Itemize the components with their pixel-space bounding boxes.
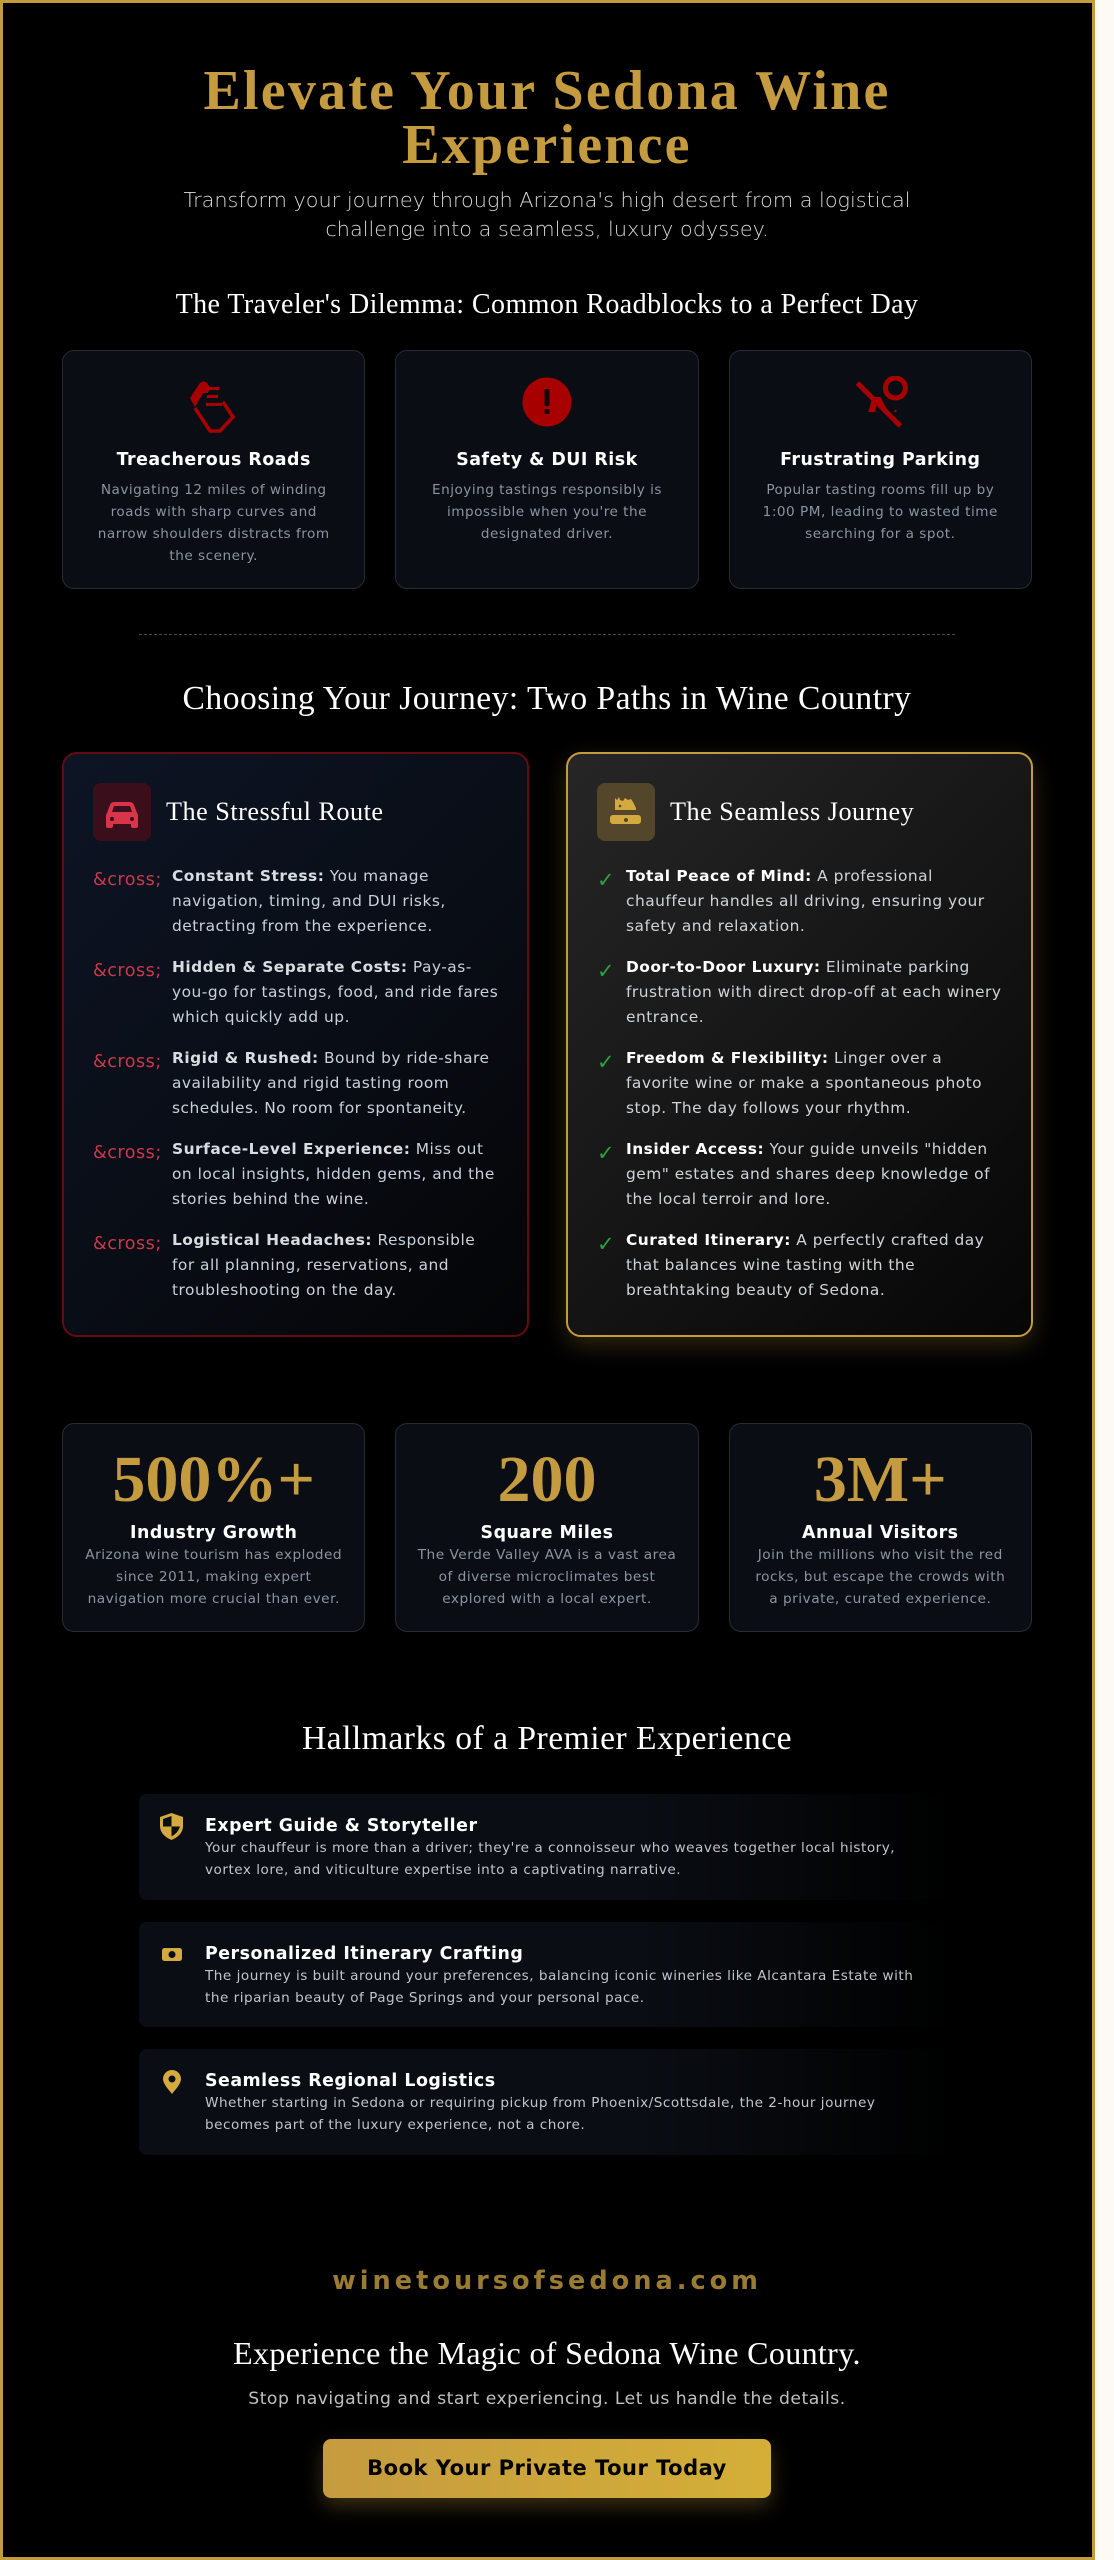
hallmark description: Whether starting in Sedona or requiring pickup from Phoenix/Scottsdale, the 2-hour journey — [205, 2095, 875, 2111]
cross items: detracting from the experience. — [172, 917, 433, 935]
stat description — [755, 1547, 1005, 1607]
stat description — [85, 1547, 342, 1607]
seamless journey content — [597, 783, 1001, 1299]
heading: hallmarks: Hallmarks of a Premier Experience — [302, 1720, 792, 1757]
stat description: navigation more crucial than ever. — [88, 1591, 340, 1607]
stressful route content — [93, 783, 498, 1299]
check items: chauffeur handles all driving, ensuring your — [626, 892, 985, 910]
cross items: schedules. No room for spontaneity. — [172, 1099, 467, 1117]
cross items: Rigid & Rushed: Bound by ride-share — [172, 1049, 489, 1067]
icon: ticket — [162, 1948, 182, 1961]
cross items: availability and rigid tasting room — [172, 1074, 449, 1092]
stat number: 500%+ — [112, 1442, 315, 1516]
cross items: Logistical Headaches: Responsible — [172, 1231, 475, 1249]
stat number: 200 — [497, 1442, 596, 1516]
cross items: for all planning, reservations, and — [172, 1256, 449, 1274]
title: Experience — [402, 114, 692, 176]
check items: the local terroir and lore. — [626, 1190, 831, 1208]
stat description: The Verde Valley AVA is a vast area — [418, 1547, 676, 1563]
check items: ✓ — [597, 958, 615, 982]
cross items: you-go for tastings, food, and ride fares — [172, 983, 498, 1001]
hallmark: logistics — [139, 2049, 959, 2154]
cross items: Surface-Level Experience: Miss out — [172, 1140, 483, 1158]
hallmark title: Expert Guide & Storyteller — [205, 1816, 478, 1836]
icon: no parking — [856, 376, 908, 428]
stat: industry growth — [62, 1423, 365, 1632]
card description: searching for a spot. — [805, 526, 955, 542]
icon: limousine — [597, 783, 655, 841]
hallmark description — [204, 1968, 913, 2006]
cross items: navigation, timing, and DUI risks, — [172, 892, 446, 910]
check items: ✓ — [597, 868, 615, 892]
stat description: since 2011, making expert — [116, 1569, 311, 1585]
stat label: Industry Growth — [130, 1523, 297, 1543]
cross items: &cross; — [93, 1234, 162, 1254]
closing heading: Experience the Magic of Sedona Wine Country. — [233, 2335, 861, 2371]
card: safety — [395, 350, 699, 589]
hallmark description — [205, 1840, 895, 1878]
hallmark: itinerary — [139, 1922, 959, 2027]
hallmark title: Personalized Itinerary Crafting — [205, 1944, 523, 1964]
card title: Safety & DUI Risk — [456, 450, 638, 470]
hallmark description: The journey is built around your preferences, balancing iconic wineries like Alcantara Estate with — [205, 1968, 913, 1984]
stat description: of diverse microclimates best — [439, 1569, 655, 1585]
check items: Insider Access: Your guide unveils "hidden — [626, 1140, 988, 1158]
stat description: a private, curated experience. — [769, 1591, 991, 1607]
cross items: Constant Stress: You manage — [172, 867, 429, 885]
button: Book Your Private Tour Today — [367, 2456, 727, 2480]
stat description — [418, 1547, 676, 1607]
stat: square miles — [395, 1423, 699, 1632]
cross items: on local insights, hidden gems, and the — [172, 1165, 495, 1183]
check items: stop. The day follows your rhythm. — [626, 1099, 911, 1117]
card description — [763, 482, 998, 542]
cross items: troubleshooting on the day. — [172, 1281, 397, 1299]
closing text: Stop navigating and start experiencing. Let us handle the details. — [248, 2388, 846, 2408]
card description: designated driver. — [481, 526, 613, 542]
check items: Curated Itinerary: A perfectly crafted day — [626, 1231, 984, 1249]
subtitle — [183, 188, 911, 241]
card description: the scenery. — [169, 548, 258, 564]
cross items: &cross; — [93, 1142, 162, 1162]
panel: seamless journey — [566, 752, 1033, 1337]
check items: that balances wine tasting with the — [626, 1256, 915, 1274]
card description: Navigating 12 miles of winding — [101, 482, 327, 498]
cross items: &cross; — [93, 1052, 162, 1072]
card description: impossible when you're the — [447, 504, 647, 520]
card title: Treacherous Roads — [117, 450, 311, 470]
check items: Door-to-Door Luxury: Eliminate parking — [626, 958, 970, 976]
stat number: 3M+ — [814, 1442, 947, 1516]
card description: roads with sharp curves and — [111, 504, 317, 520]
hallmark description — [205, 2095, 875, 2133]
panel heading: The Stressful Route — [166, 797, 384, 826]
card: treacherous roads — [62, 350, 365, 589]
check items: ✓ — [597, 1050, 615, 1074]
card title: Frustrating Parking — [780, 450, 980, 470]
hallmark description: becomes part of the luxury experience, not a chore. — [205, 2117, 585, 2133]
check items — [597, 867, 1001, 1299]
check items: favorite wine or make a spontaneous photo — [626, 1074, 982, 1092]
icon: shield — [160, 1813, 183, 1840]
icon: car — [93, 783, 151, 841]
subtitle: challenge into a seamless, luxury odyssey. — [325, 217, 769, 241]
heading: journey: Choosing Your Journey: Two Paths in Wine Country — [183, 680, 911, 717]
check items: Freedom & Flexibility: Linger over a — [626, 1049, 942, 1067]
stat description: Join the millions who visit the red — [758, 1547, 1003, 1563]
card description: Enjoying tastings responsibly is — [432, 482, 662, 498]
hallmark description: Your chauffeur is more than a driver; they're a connoisseur who weaves together local history, — [205, 1840, 895, 1856]
heading: dilemma: The Traveler's Dilemma: Common Roadblocks to a Perfect Day — [176, 288, 918, 320]
subtitle: Transform your journey through Arizona's high desert from a logistical — [183, 188, 911, 212]
button — [323, 2439, 771, 2498]
check items: gem" estates and shares deep knowledge of — [626, 1165, 990, 1183]
hallmark description: vortex lore, and viticulture expertise into a captivating narrative. — [205, 1862, 681, 1878]
hallmark description: the riparian beauty of Page Springs and your personal pace. — [205, 1990, 645, 2006]
icon: map pin — [163, 2070, 181, 2094]
title: Elevate Your Sedona Wine — [203, 60, 891, 122]
hallmark title: Seamless Regional Logistics — [205, 2071, 496, 2091]
card description: narrow shoulders distracts from — [98, 526, 330, 542]
stat label: Annual Visitors — [802, 1523, 959, 1543]
stat: annual visitors — [729, 1423, 1032, 1632]
cross items: stories behind the wine. — [172, 1190, 369, 1208]
stat description: explored with a local expert. — [442, 1591, 652, 1607]
card: parking — [729, 350, 1032, 589]
cross items: Hidden & Separate Costs: Pay-as- — [172, 958, 472, 976]
icon: road — [190, 382, 236, 433]
panel heading: The Seamless Journey — [670, 797, 914, 826]
check items: entrance. — [626, 1008, 704, 1026]
check items: Total Peace of Mind: A professional — [626, 867, 933, 885]
panel: stressful route — [62, 752, 529, 1337]
cross items: which quickly add up. — [172, 1008, 350, 1026]
card description: Popular tasting rooms fill up by — [766, 482, 994, 498]
stat description: rocks, but escape the crowds with — [755, 1569, 1005, 1585]
card description: 1:00 PM, leading to wasted time — [763, 504, 998, 520]
icon: warning — [522, 378, 572, 426]
check items: frustration with direct drop-off at each winery — [626, 983, 1001, 1001]
cross items — [93, 867, 498, 1299]
check items: safety and relaxation. — [626, 917, 805, 935]
title — [203, 60, 891, 176]
check items: ✓ — [597, 1232, 615, 1256]
card description — [98, 482, 330, 564]
hallmark: expert guide — [139, 1794, 959, 1900]
card description — [432, 482, 662, 542]
check items: ✓ — [597, 1140, 615, 1164]
stat description: Arizona wine tourism has exploded — [85, 1547, 342, 1563]
check items: breathtaking beauty of Sedona. — [626, 1281, 885, 1299]
cross items: &cross; — [93, 870, 162, 890]
stat label: Square Miles — [481, 1523, 613, 1543]
website url: winetoursofsedona.com — [332, 2266, 762, 2296]
cross items: &cross; — [93, 960, 162, 980]
